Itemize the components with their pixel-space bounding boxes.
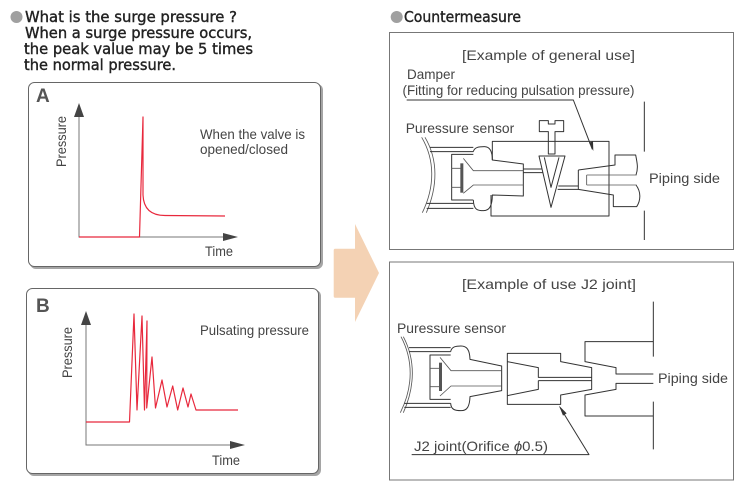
panel B caption: Pulsating pressure <box>200 322 309 338</box>
panel: example of general use <box>390 32 734 250</box>
panel B pressure label: Pressure <box>59 327 75 378</box>
J2 joint label: J2 joint(Orifice ϕ0.5) <box>414 438 548 454</box>
panel B time label: Time <box>212 452 240 468</box>
damper label: (Fitting for reducing pulsation pressure) <box>402 82 634 98</box>
panel B: pulsating pressure <box>26 288 321 476</box>
panel B letter: B <box>36 296 50 317</box>
panel A caption: opened/closed <box>200 141 288 157</box>
J2 joint title: [Example of use J2 joint] <box>462 276 636 292</box>
heading: surge pressure explanation: the peak value may be 5 times <box>24 40 253 58</box>
panel A caption: When the valve is <box>200 126 305 142</box>
panel B axes <box>81 311 245 449</box>
piping side label: Piping side <box>649 170 720 186</box>
J2 joint drawing <box>400 302 653 455</box>
sensor label: Puressure sensor <box>406 120 515 136</box>
panel A caption <box>200 126 305 157</box>
arrow: from problem to countermeasure <box>334 224 379 322</box>
heading: surge pressure explanation <box>10 8 253 74</box>
sensor label: Puressure sensor <box>397 320 506 336</box>
panel A axes <box>74 103 238 241</box>
heading: surge pressure explanation: When a surge pressure occurs, <box>25 24 252 42</box>
heading: surge pressure explanation: What is the surge pressure ? <box>25 8 237 26</box>
panel A: surge on valve open/close <box>28 82 323 269</box>
panel A time label: Time <box>205 243 233 259</box>
heading: countermeasure: Countermeasure <box>404 8 521 26</box>
panel A surge curve <box>79 117 225 237</box>
panel: example of use J2 joint <box>390 262 734 480</box>
panel B pulsating curve <box>86 314 238 422</box>
heading: surge pressure explanation: the normal pressure. <box>24 56 176 74</box>
damper label: Damper <box>407 66 455 82</box>
damper fitting drawing <box>407 100 644 240</box>
piping side label: Piping side <box>658 370 728 386</box>
panel A pressure label: Pressure <box>53 116 69 167</box>
damper label <box>402 66 634 98</box>
panel A letter: A <box>36 86 50 107</box>
general use title: [Example of general use] <box>462 47 635 63</box>
